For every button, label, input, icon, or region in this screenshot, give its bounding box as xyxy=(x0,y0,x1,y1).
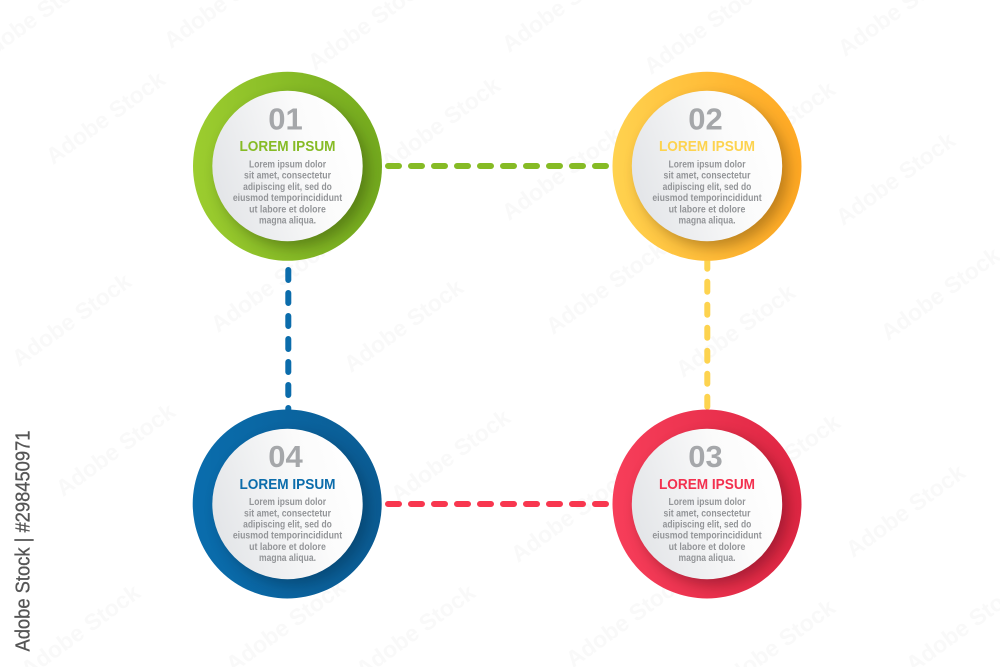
body text 01 xyxy=(233,159,343,226)
body text 04 xyxy=(233,497,343,564)
panel: step 01 xyxy=(193,72,382,261)
body text 03: Lorem ipsum dolor xyxy=(668,497,746,508)
body text 01: magna aliqua. xyxy=(259,215,316,226)
watermark pattern: Adobe Stock xyxy=(541,236,670,339)
panel: step 04 xyxy=(193,410,382,598)
arrow: red dashed connector 03 to 04 xyxy=(388,501,606,507)
body text 03: adipiscing elit, sed do xyxy=(663,520,751,531)
body text 03 xyxy=(652,497,762,564)
body text 02: adipiscing elit, sed do xyxy=(663,182,751,193)
arrow: green dashed connector 01 to 02 xyxy=(388,163,606,169)
body text 04: adipiscing elit, sed do xyxy=(243,520,332,531)
arrow: blue dashed connector 04 to 01 xyxy=(285,270,291,412)
panel: step 02 xyxy=(612,72,802,261)
body text 04: ut labore et dolore xyxy=(249,542,326,553)
inner disc xyxy=(212,429,363,579)
number 01: 01 xyxy=(268,102,303,136)
heading 02: LOREM IPSUM xyxy=(659,139,755,155)
body text 02: ut labore et dolore xyxy=(669,204,746,215)
watermark pattern: Adobe Stock xyxy=(716,409,845,512)
panel: step 03 xyxy=(612,410,802,598)
inner disc shadow xyxy=(638,98,788,248)
watermark pattern: Adobe Stock xyxy=(386,404,515,507)
outer ring red xyxy=(612,410,802,598)
outer ring green xyxy=(193,72,382,261)
heading 03: LOREM IPSUM xyxy=(659,477,755,493)
inner disc shadow xyxy=(218,98,368,248)
body text 03: eiusmod temporincididunt xyxy=(652,531,762,542)
body text 01: adipiscing elit, sed do xyxy=(243,182,332,193)
watermark pattern: Adobe Stock xyxy=(206,234,335,337)
watermark pattern: Adobe Stock xyxy=(376,72,505,175)
body text 04: eiusmod temporincididunt xyxy=(233,531,343,542)
body text 02: sit amet, consectetur xyxy=(664,171,751,182)
number 04: 04 xyxy=(268,439,303,474)
body text 02: magna aliqua. xyxy=(678,215,736,226)
watermark pattern: Adobe Stock xyxy=(671,279,800,382)
body text 03: ut labore et dolore xyxy=(669,542,746,553)
watermark pattern: Adobe Stock xyxy=(51,398,180,501)
body text 01: Lorem ipsum dolor xyxy=(249,159,326,170)
number 03: 03 xyxy=(688,439,723,474)
body text 04: Lorem ipsum dolor xyxy=(249,497,326,508)
watermark pattern: Adobe Stock xyxy=(41,66,170,169)
heading 04: LOREM IPSUM xyxy=(240,477,336,493)
inner disc xyxy=(632,429,782,579)
watermark pattern: Adobe Stock xyxy=(506,464,635,567)
watermark pattern: Adobe Stock xyxy=(339,274,468,377)
watermark pattern: Adobe Stock xyxy=(7,268,136,371)
body text 01: eiusmod temporincididunt xyxy=(233,193,343,204)
watermark pattern: Adobe Stock xyxy=(831,127,960,230)
inner disc xyxy=(632,91,782,241)
body text 03: sit amet, consectetur xyxy=(664,508,751,519)
watermark pattern: Adobe Stock xyxy=(497,122,626,225)
inner disc shadow xyxy=(218,435,368,585)
body text 01: sit amet, consectetur xyxy=(244,171,331,182)
outer ring blue xyxy=(193,410,382,598)
inner disc shadow xyxy=(638,435,788,585)
body text 02: Lorem ipsum dolor xyxy=(668,159,746,170)
body text 02 xyxy=(652,159,762,226)
outer ring yellow xyxy=(612,72,802,261)
number 02: 02 xyxy=(688,102,723,136)
inner disc xyxy=(212,91,363,241)
body text 02: eiusmod temporincididunt xyxy=(652,193,762,204)
body text 04: magna aliqua. xyxy=(259,553,316,564)
body text 04: sit amet, consectetur xyxy=(244,508,331,519)
body text 01: ut labore et dolore xyxy=(249,204,326,215)
stock image credit: Adobe Stock | #298450971 xyxy=(12,430,34,652)
watermark pattern: Adobe Stock xyxy=(711,76,840,179)
heading 01: LOREM IPSUM xyxy=(240,139,336,155)
body text 03: magna aliqua. xyxy=(678,553,736,564)
arrow: yellow dashed connector 02 to 03 xyxy=(704,258,710,412)
watermark pattern: Adobe Stock xyxy=(841,459,970,562)
